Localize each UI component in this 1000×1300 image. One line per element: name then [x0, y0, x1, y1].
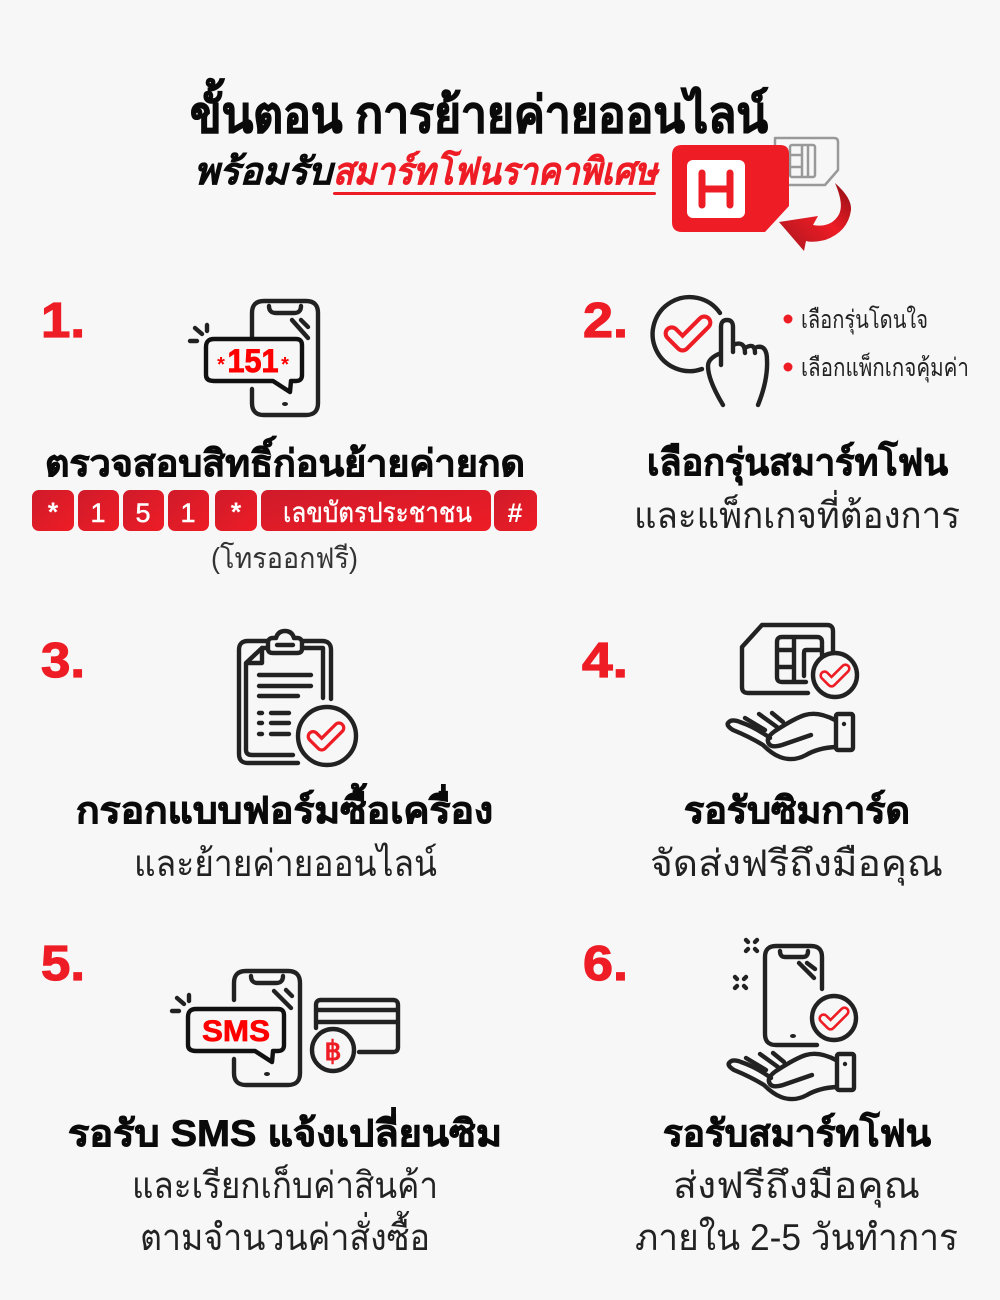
subtitle: พร้อมรับ	[194, 151, 336, 192]
key sequence: *	[48, 497, 59, 527]
key sequence: *	[231, 497, 242, 527]
key sequence: 1	[90, 498, 106, 528]
list: options	[784, 305, 969, 383]
icon: phone in hand with check	[729, 940, 856, 1099]
step 5 text: ตามจำนวนค่าสั่งซื้อ	[140, 1210, 430, 1258]
key sequence: #	[507, 498, 523, 528]
step 6 text	[635, 1165, 958, 1258]
step 5 text: และเรียกเก็บค่าสินค้า	[132, 1162, 438, 1206]
icon: phone with 151 speech bubble: *	[281, 354, 289, 376]
step 3 heading: กรอกแบบฟอร์มซื้อเครื่อง	[76, 783, 493, 831]
icon: SIM card logo with arrow	[672, 138, 851, 251]
icon: SIM card in hand with check	[728, 625, 857, 759]
step 1 number: 1.	[41, 294, 85, 348]
note: (โทรออกฟรี)	[211, 541, 358, 575]
title: ขั้นตอน การย้ายค่ายออนไลน์	[190, 78, 769, 143]
step 2 heading: เลือกรุ่นสมาร์ทโฟน	[647, 440, 948, 486]
step 6 text: ส่งฟรีถึงมือคุณ	[673, 1165, 920, 1208]
key sequence: 1	[180, 498, 196, 528]
key sequence	[32, 490, 537, 531]
step 5 heading: รอรับ SMS แจ้งเปลี่ยนซิม	[68, 1107, 502, 1154]
icon: phone SMS bubble and card with baht coin	[172, 971, 398, 1085]
icon: phone SMS bubble and card with baht coin: SMS	[202, 1015, 270, 1048]
icon: phone with 151 speech bubble: *	[217, 354, 225, 376]
list: options: เลือกรุ่นโดนใจ	[801, 305, 928, 335]
list: options: เลือกแพ็กเกจคุ้มค่า	[801, 352, 969, 383]
icon: clipboard with check	[239, 631, 356, 765]
icon: phone with 151 speech bubble: 151	[228, 343, 278, 379]
step 4 text: จัดส่งฟรีถึงมือคุณ	[650, 843, 943, 886]
step 3 number: 3.	[41, 634, 85, 688]
step 4 heading: รอรับซิมการ์ด	[684, 790, 910, 831]
key sequence: เลขบัตรประชาชน	[283, 497, 472, 528]
subtitle	[194, 149, 660, 195]
icon: phone SMS bubble and card with baht coin: ฿	[324, 1036, 342, 1066]
step 2 number: 2.	[583, 294, 628, 348]
subtitle: สมาร์ทโฟนราคาพิเศษ	[333, 149, 660, 192]
step 6 text: ภายใน 2-5 วันทำการ	[635, 1216, 958, 1258]
step 6 heading: รอรับสมาร์ทโฟน	[663, 1111, 931, 1154]
key sequence: 5	[135, 498, 151, 528]
step 3 text: และย้ายค่ายออนไลน์	[134, 842, 437, 884]
step 4 number: 4.	[582, 634, 628, 688]
step 6 number: 6.	[583, 937, 628, 991]
step 5 text	[132, 1162, 438, 1258]
step 2 text: และแพ็กเกจที่ต้องการ	[634, 489, 960, 536]
step 1 heading: ตรวจสอบสิทธิ์ก่อนย้ายค่ายกด	[45, 436, 525, 484]
step 5 number: 5.	[41, 937, 85, 991]
icon: phone with 151 speech bubble	[190, 301, 318, 415]
icon: hand pointing at check	[653, 297, 767, 405]
